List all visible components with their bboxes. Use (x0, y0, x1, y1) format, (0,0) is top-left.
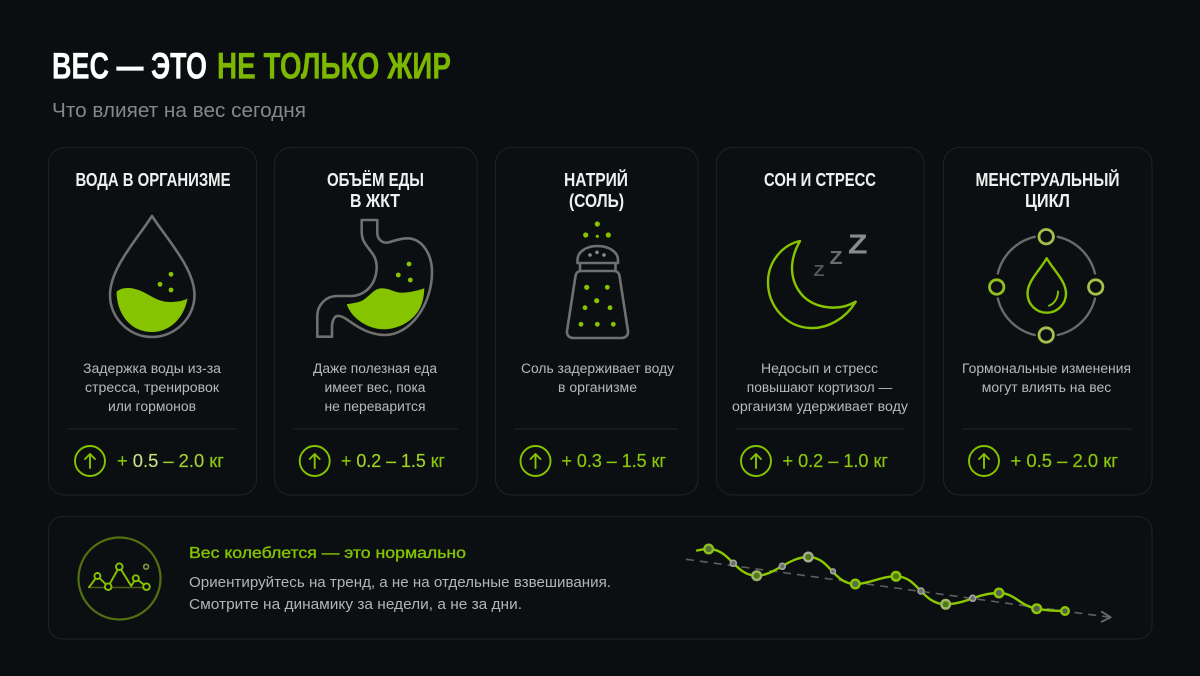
description: sodium: в организме (558, 380, 637, 395)
description: sleep: Недосып и стресс (761, 361, 878, 376)
description: water: Задержка воды из-за (83, 361, 221, 376)
heading: water: ВОДА В ОРГАНИЗМЕ (76, 169, 230, 190)
value: food: + 0.2 – 1.5 кг (341, 450, 445, 471)
icon: chart in circle (78, 538, 160, 620)
description: water: или гормонов (108, 399, 196, 414)
icon: up arrow (969, 446, 999, 476)
value: sleep: + 0.2 – 1.0 кг (782, 450, 888, 471)
heading: sodium: НАТРИЙ (564, 169, 628, 190)
heading: sodium (564, 169, 628, 211)
description: sleep (732, 361, 908, 414)
panel: sodium (496, 148, 698, 495)
title (52, 44, 451, 86)
icon: up arrow (520, 446, 550, 476)
value: sodium: + 0.3 – 1.5 кг (562, 450, 666, 471)
title: НЕ ТОЛЬКО ЖИР (217, 44, 451, 86)
icon: moon and z: Z (830, 248, 842, 268)
icon: salt shaker (567, 221, 628, 338)
icon: up arrow (300, 446, 330, 476)
value: cycle: + 0.5 – 2.0 кг (1010, 450, 1118, 471)
callout heading: Вес колеблется — это нормально (189, 545, 466, 562)
description: food (313, 361, 437, 414)
line chart: weight trend (686, 545, 1111, 622)
description: sleep: организм удерживает воду (732, 399, 908, 414)
description: water (83, 361, 221, 414)
heading: cycle (976, 169, 1120, 211)
heading: cycle: МЕНСТРУАЛЬНЫЙ (976, 169, 1120, 190)
panel: menstrual cycle (944, 148, 1152, 495)
callout text: Ориентируйтесь на тренд, а не на отдельные взвешивания. (189, 574, 611, 591)
icon: water drop (110, 216, 194, 337)
description: sleep: повышают кортизол — (747, 380, 893, 395)
icon: stomach (317, 220, 432, 337)
icon: up arrow (75, 446, 105, 476)
heading: cycle: ЦИКЛ (1025, 190, 1070, 211)
icon: moon and z: Z (848, 228, 868, 259)
description: sodium (521, 361, 674, 395)
description: food: имеет вес, пока (324, 380, 426, 395)
panel: sleep and stress (716, 148, 924, 495)
icon: cycle with drop (990, 230, 1103, 342)
heading: food (327, 169, 424, 211)
description: food: Даже полезная еда (313, 361, 437, 376)
heading: food: ОБЪЁМ ЕДЫ (327, 169, 424, 190)
description: food: не переварится (324, 399, 426, 414)
icon: moon and z (768, 228, 868, 328)
heading: sleep: СОН И СТРЕСС (764, 169, 876, 190)
description: water: стресса, тренировок (85, 380, 219, 395)
value: water: + 0.5 – 2.0 кг (117, 450, 224, 471)
icon: up arrow (741, 446, 771, 476)
description: cycle (962, 361, 1131, 395)
panel: weight fluctuation note (48, 516, 1152, 639)
panel: water in the body (48, 148, 256, 495)
callout text: Смотрите на динамику за недели, а не за дни. (189, 596, 522, 613)
callout text (189, 574, 611, 613)
subtitle: Что влияет на вес сегодня (52, 100, 306, 122)
title: ВЕС — ЭТО (52, 44, 207, 86)
description: cycle: могут влиять на вес (982, 380, 1112, 395)
description: sodium: Соль задерживает воду (521, 361, 674, 376)
icon: moon and z: Z (814, 263, 825, 280)
heading: sodium: (СОЛЬ) (569, 190, 624, 211)
heading: food: В ЖКТ (350, 190, 401, 211)
panel: food volume (274, 148, 477, 495)
description: cycle: Гормональные изменения (962, 361, 1131, 376)
